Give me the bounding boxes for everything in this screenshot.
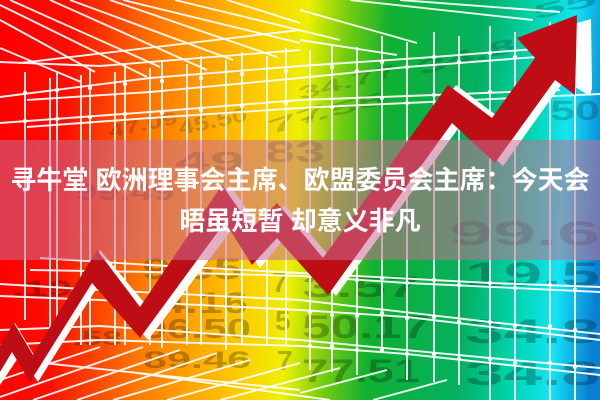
background stock numbers: 34.8 [465, 313, 600, 351]
background stock numbers: 47.09 [107, 108, 179, 142]
background stock numbers: 3.57 [302, 271, 420, 304]
title: 寻牛堂 欧洲理事会主席、欧盟委员会主席：今天会 [10, 165, 590, 195]
translucent title banner [0, 140, 600, 260]
background stock numbers: 7 [272, 267, 288, 298]
background stock numbers: 50 [550, 95, 600, 126]
background stock numbers: 49 [175, 146, 245, 176]
grid intersection dots [23, 51, 577, 369]
background stock numbers: 34.8 [465, 355, 600, 393]
background stock numbers: 7 [277, 345, 293, 376]
background stock numbers: 45.50 [176, 104, 250, 140]
background stock numbers: 89.46 [143, 347, 251, 374]
background stock numbers: 4.16 [160, 287, 248, 320]
background stock numbers: -.55 [296, 88, 388, 129]
background stock numbers: 99.49 [75, 179, 175, 206]
background stock numbers: 83 [265, 136, 325, 169]
background stock numbers: 34.77 [296, 60, 398, 104]
title [10, 165, 590, 236]
background stock numbers: 77 [265, 100, 329, 140]
background stock numbers: 34.8 [416, 34, 518, 80]
background stock numbers: 99.6 [450, 215, 600, 253]
background stock numbers: 5 [275, 305, 291, 336]
background stock numbers: 50.17 [302, 309, 430, 345]
title: 晤虽短暂 却意义非凡 [179, 206, 421, 236]
background stock numbers: 77.51 [302, 353, 420, 389]
background stock numbers: 9.55 [142, 253, 242, 286]
background stock numbers: .19 [12, 276, 72, 301]
background stock numbers: 96.50 [143, 313, 251, 344]
background stock numbers: .58 [72, 328, 122, 350]
background stock numbers: 19.5 [465, 256, 600, 294]
